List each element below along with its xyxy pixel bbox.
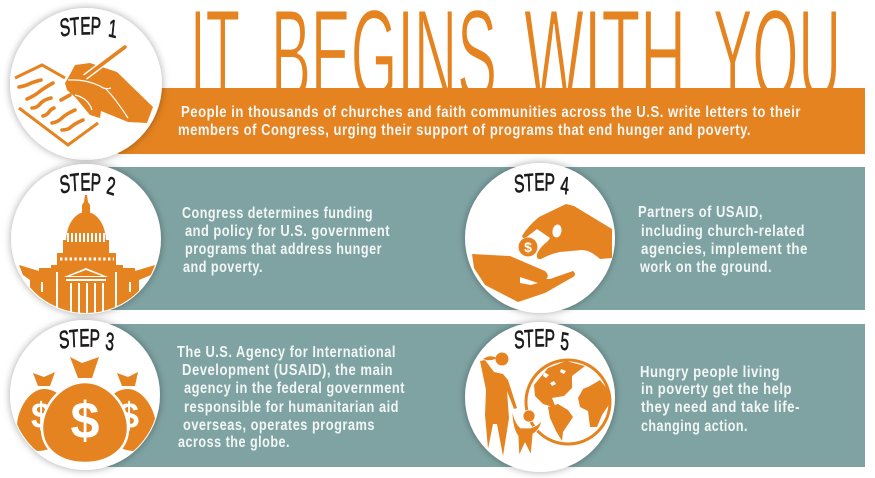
- step 1 text: [178, 104, 801, 139]
- step 5 text: in poverty get the help: [641, 381, 792, 398]
- step 3 text: across the globe.: [178, 434, 290, 451]
- icon: adult, child and globe: [480, 352, 610, 456]
- step 3 label: STEP 3: [58, 325, 115, 357]
- step 4 text: [638, 204, 808, 276]
- step 4 text: agencies, implement the: [641, 241, 808, 258]
- step 2 text: Congress determines funding: [182, 205, 373, 222]
- step 4 text: including church-related: [641, 223, 805, 240]
- step 3 text: overseas, operates programs: [183, 417, 375, 434]
- step 5 badge: [465, 322, 615, 472]
- step 3 text: responsible for humanitarian aid: [184, 399, 399, 416]
- step 5 label: STEP 5: [513, 325, 570, 357]
- step 2 text: [182, 205, 390, 276]
- step 1 text: members of Congress, urging their support of programs that end hunger and poverty.: [178, 122, 751, 139]
- adult figure: [480, 352, 517, 456]
- step 5 text: they need and take life-: [641, 399, 800, 416]
- step 2 text: and poverty.: [183, 259, 263, 276]
- icon: capitol building: [19, 195, 155, 315]
- icon: hands passing a coin: [472, 204, 612, 302]
- icon: money bags: $: [31, 395, 51, 436]
- icon: money bags: [17, 357, 156, 463]
- center bag: [42, 382, 128, 463]
- step 5 text: Hungry people living: [640, 364, 780, 381]
- globe: [526, 360, 610, 444]
- step 4 label: STEP 4: [513, 169, 570, 201]
- step 2 text: programs that address hunger: [185, 241, 382, 258]
- step 4 text: work on the ground.: [639, 259, 772, 276]
- left bag: [17, 372, 57, 451]
- panel: step 1 band: [118, 88, 865, 154]
- step 2 badge: [11, 164, 161, 315]
- coin: $: [524, 239, 532, 255]
- icon: money bags: $: [71, 392, 100, 450]
- step 2 text: and policy for U.S. government: [185, 223, 390, 240]
- step 5 text: changing action.: [641, 418, 748, 435]
- right bag: [114, 372, 155, 451]
- panel: steps 3 and 5 band: [100, 324, 865, 467]
- step 3 badge: [10, 320, 160, 470]
- step 3 text: agency in the federal government: [184, 380, 405, 397]
- step 5 text: [640, 364, 800, 435]
- step 1 badge: [10, 8, 162, 160]
- step 4 badge: [465, 163, 615, 313]
- step 1 label: STEP 1: [58, 12, 118, 44]
- icon: money bags: $: [119, 395, 139, 436]
- lower hand: [472, 254, 575, 302]
- panel: steps 2 and 4 band: [100, 167, 865, 310]
- child figure: [512, 409, 542, 456]
- step 3 text: Development (USAID), the main: [182, 362, 393, 379]
- step 3 text: [177, 344, 405, 451]
- upper hand: [522, 204, 612, 259]
- icon: hand writing on paper: [15, 47, 153, 145]
- step 4 text: Partners of USAID,: [638, 204, 763, 221]
- step 2 label: STEP 2: [58, 169, 117, 202]
- step 3 text: The U.S. Agency for International: [177, 344, 396, 361]
